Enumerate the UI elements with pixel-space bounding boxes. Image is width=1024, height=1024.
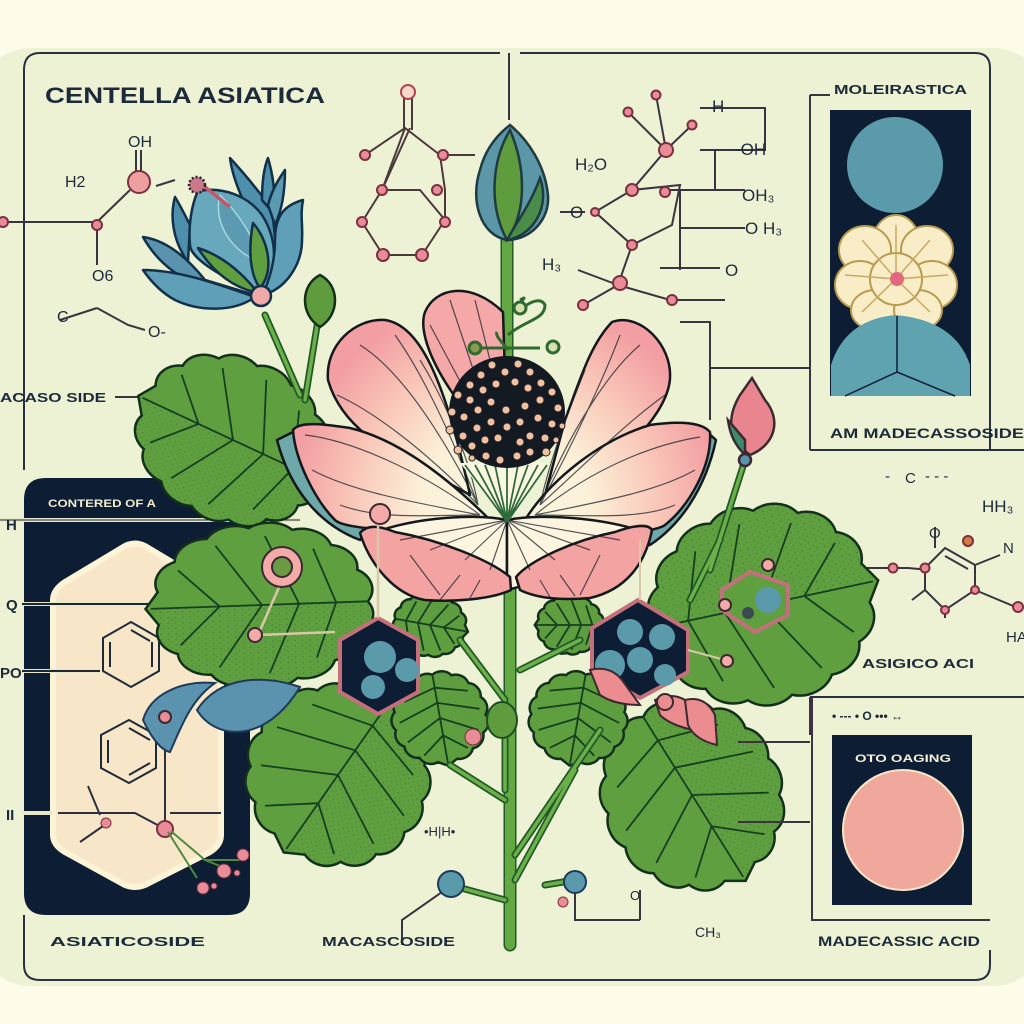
left edge labels: Q — [6, 597, 18, 614]
pink buds cluster — [590, 669, 717, 745]
label: OH H2 O: C — [57, 309, 69, 326]
label: OH H2 O: O6 — [92, 268, 113, 285]
labels: top right formula: O — [570, 203, 583, 222]
label: OH H2 O: O- — [148, 324, 166, 341]
bottom atoms: •H|H• — [424, 824, 456, 839]
chemical structure: top right — [560, 90, 765, 310]
connector lines — [680, 322, 810, 420]
labels: top right formula: OH₃ — [742, 186, 774, 205]
labels: right formula — [885, 468, 1024, 646]
bottom atoms: O — [630, 888, 640, 903]
small pink branch — [168, 832, 249, 894]
bottom labels: MACASCOSIDE — [322, 934, 455, 949]
labels: top right formula — [542, 97, 782, 280]
panel: molecule — [810, 82, 1024, 450]
panel: bottom right oto oaging — [810, 697, 990, 920]
bottom labels — [50, 924, 980, 949]
molecule hexagon: left — [248, 504, 419, 714]
bottom labels: CH₃ — [695, 924, 721, 940]
label: OH H2 O: H2 — [65, 174, 86, 191]
chemical structure: top middle ring — [357, 85, 475, 261]
label: OH H2 O: OH — [128, 134, 152, 151]
labels: right formula: - - - — [925, 468, 948, 485]
labels: right formula: O — [929, 525, 941, 542]
label: macaso side: ACASO SIDE — [0, 390, 106, 405]
panel: bottom right oto oaging: • --- • O ••• ↔ — [832, 709, 903, 723]
small bud at stem — [487, 702, 517, 738]
bottom labels: ASIATICOSIDE — [50, 934, 206, 949]
labels: right formula: - — [885, 468, 890, 485]
top connector line — [508, 53, 510, 120]
central flower — [277, 291, 716, 601]
curled tendril — [469, 298, 559, 354]
pink bud right — [728, 378, 774, 466]
panel: molecule: MOLEIRASTICA — [834, 82, 968, 97]
molecule hexagon: right leaf — [719, 559, 788, 632]
labels: top right formula: O H₃ — [745, 219, 782, 238]
leaves behind flower — [104, 321, 899, 928]
label: macaso side — [0, 390, 140, 405]
chemical structure: right — [780, 527, 1023, 618]
labels: right formula: C — [905, 470, 916, 487]
blue flower — [143, 158, 303, 309]
left edge labels: II — [6, 807, 14, 824]
labels: right formula: N — [1003, 540, 1014, 557]
label: asigico aci: ASIGICO ACI — [862, 656, 974, 671]
green bud left — [305, 275, 335, 327]
left edge labels — [0, 517, 22, 824]
panel: content left: CONTERED OF A — [48, 498, 156, 510]
panel: content left — [0, 478, 300, 915]
labels: top right formula: H₃ — [542, 255, 561, 274]
molecule hexagon: centre right — [592, 540, 733, 698]
label: OH H2 O — [57, 134, 166, 341]
top bud — [476, 125, 548, 240]
bottom labels: MADECASSIC ACID — [818, 933, 980, 949]
labels: top right formula: O — [725, 261, 738, 280]
panel: molecule: AM MADECASSOSIDE — [830, 425, 1024, 441]
labels: right formula: HH₃ — [982, 497, 1013, 516]
petal veins — [305, 300, 700, 600]
chemical structure: top left — [0, 150, 175, 330]
stamen filaments — [460, 463, 550, 522]
panel: bottom right oto oaging: OTO OAGING — [855, 753, 951, 765]
blue bud left — [143, 680, 300, 752]
labels: top right formula: H₂O — [575, 155, 607, 174]
bottom atoms — [402, 729, 810, 945]
labels: top right formula: H — [712, 97, 724, 116]
stems — [265, 240, 745, 945]
stamen cluster — [446, 356, 565, 468]
title: CENTELLA ASIATICA — [45, 83, 325, 108]
left edge labels: PO — [0, 665, 22, 682]
left edge labels: H — [6, 517, 17, 534]
labels: top right formula: -OH — [735, 140, 766, 159]
